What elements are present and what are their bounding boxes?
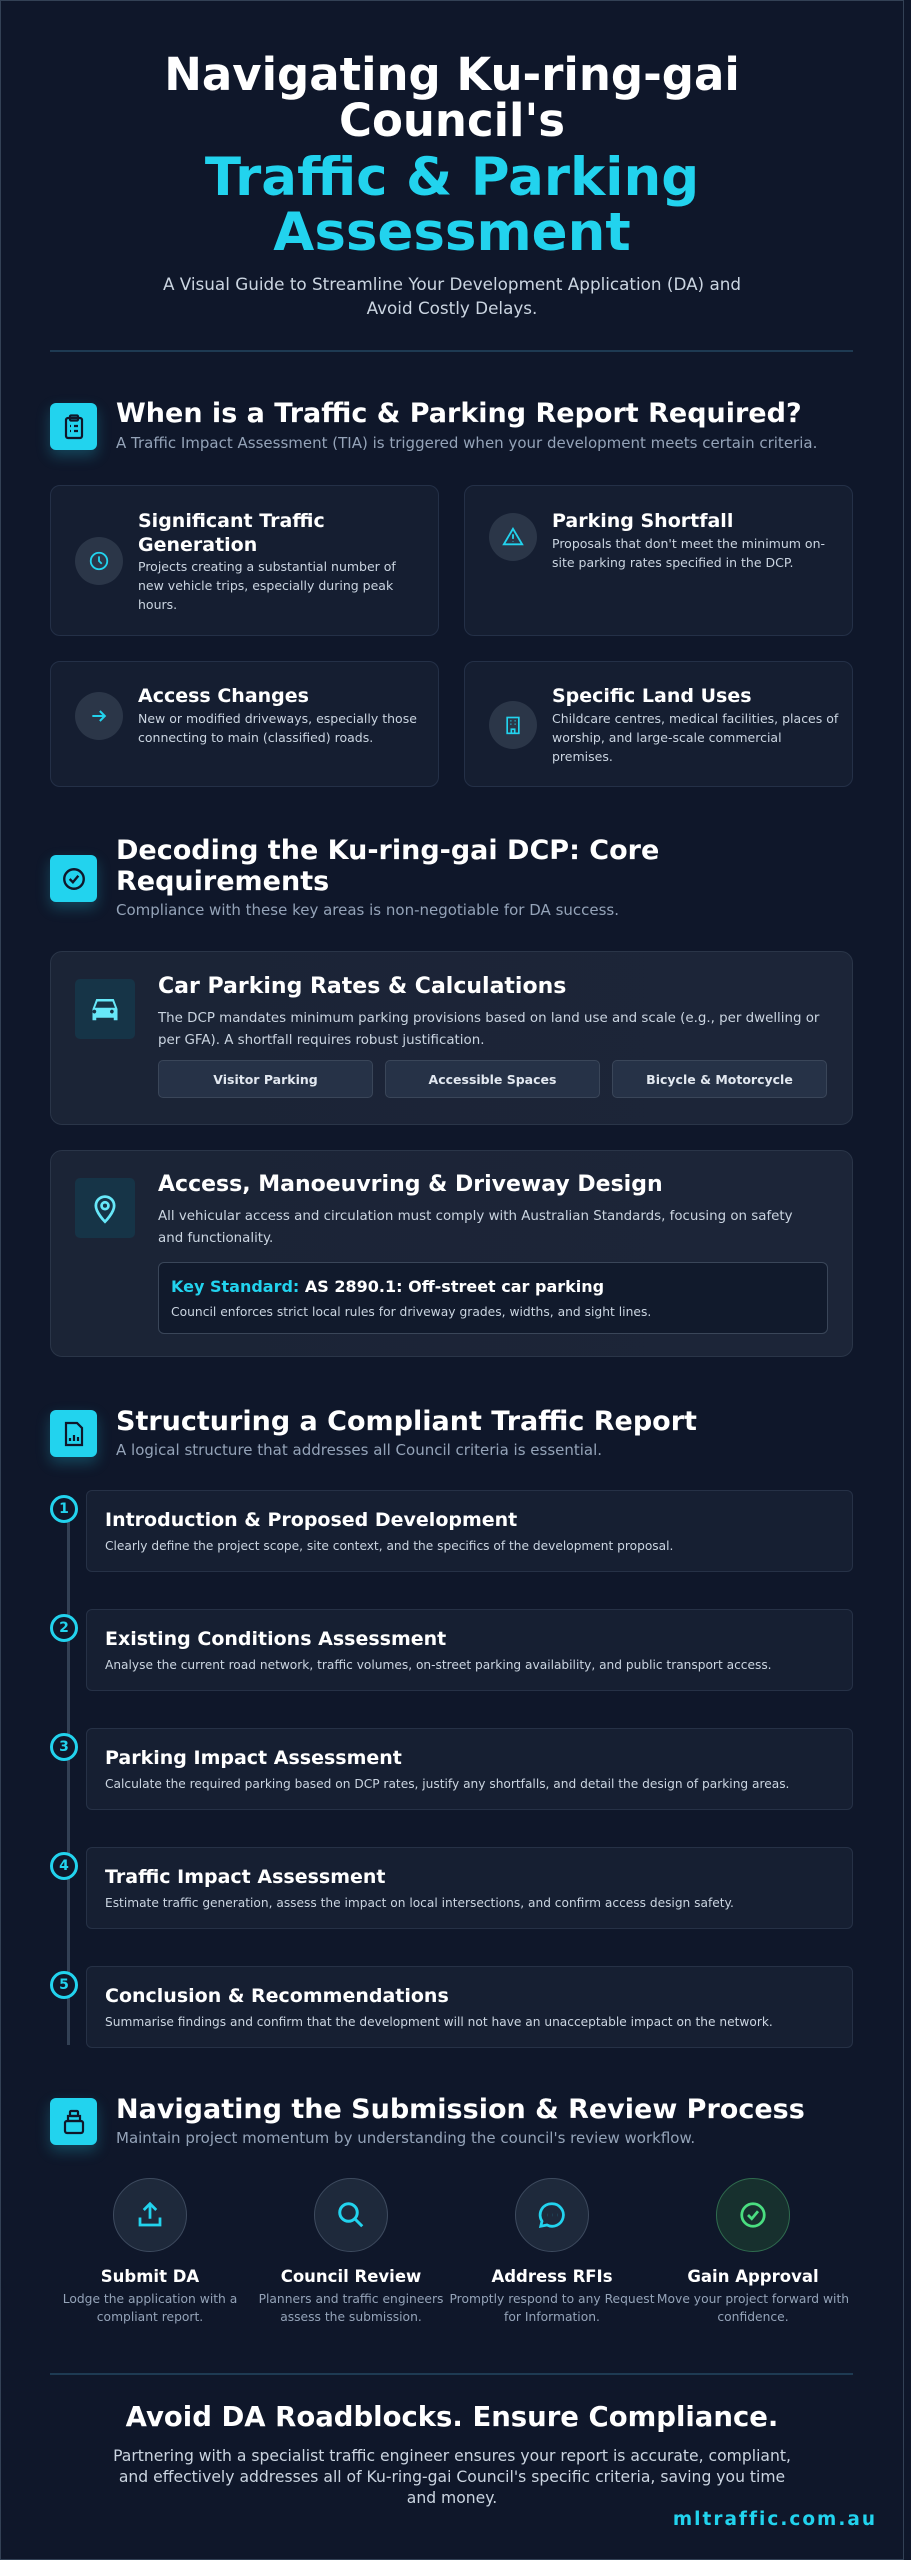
icon: report bbox=[50, 1410, 97, 1457]
title: Council's bbox=[339, 94, 565, 147]
process: submit bbox=[113, 2178, 187, 2252]
panel: car parking: The DCP mandates minimum parking provisions based on land use and scale (e.g., per dwelling or per GFA). A shortfall requires robust justification. bbox=[158, 1011, 819, 1048]
website: mltraffic.com.au bbox=[673, 2509, 877, 2530]
step 5: Conclusion & Recommendations bbox=[105, 1985, 449, 2007]
icon: building bbox=[489, 701, 537, 749]
closing text: Partnering with a specialist traffic engineer ensures your report is accurate, compliant, and effectively addresses all of Ku-ring-gai Council's specific criteria, saving you time and money. bbox=[113, 2447, 791, 2507]
step 3: Calculate the required parking based on DCP rates, justify any shortfalls, and detail the design of parking areas. bbox=[105, 1777, 789, 1791]
title: Assessment bbox=[273, 202, 631, 263]
process: review bbox=[314, 2178, 388, 2252]
heading: Structuring a Compliant Traffic Report bbox=[116, 1406, 697, 1437]
heading: When is a Traffic & Parking Report Required? bbox=[116, 398, 802, 429]
pill: bicycle: Bicycle & Motorcycle bbox=[646, 1072, 793, 1086]
panel: access design: Access, Manoeuvring & Driveway Design bbox=[158, 1172, 663, 1197]
text: Promptly respond to any Request for Information. bbox=[449, 2292, 655, 2324]
panel: access design: and functionality. bbox=[158, 1231, 273, 1246]
text: 3 bbox=[59, 1739, 69, 1755]
panel: access design bbox=[50, 1150, 853, 1357]
card: significant traffic: Significant Traffic bbox=[138, 510, 325, 532]
process: approval bbox=[716, 2178, 790, 2252]
card: parking shortfall bbox=[464, 485, 853, 636]
section 3 header bbox=[44, 1406, 697, 1470]
panel: car parking bbox=[50, 951, 853, 1125]
heading: Decoding the Ku-ring-gai DCP: Core bbox=[116, 835, 659, 866]
text: Planners and traffic engineers assess the submission. bbox=[259, 2292, 443, 2324]
step 1: Clearly define the project scope, site context, and the specifics of the development proposal. bbox=[105, 1539, 673, 1553]
pill: accessible: Accessible Spaces bbox=[429, 1072, 556, 1086]
icon: car bbox=[75, 979, 135, 1039]
heading: Navigating the Submission & Review Process bbox=[116, 2094, 805, 2125]
section 2 header bbox=[44, 835, 659, 919]
card: significant traffic bbox=[50, 485, 439, 636]
text: Gain Approval bbox=[687, 2267, 819, 2286]
card: access changes: New or modified driveways, especially those connecting to main (classified) roads. bbox=[138, 711, 417, 745]
step 4: Estimate traffic generation, assess the impact on local intersections, and confirm access design safety. bbox=[105, 1896, 734, 1910]
section 1 header: A Traffic Impact Assessment (TIA) is triggered when your development meets certain criteria. bbox=[116, 434, 817, 452]
step 1 bbox=[86, 1490, 853, 1572]
step 2: Analyse the current road network, traffic volumes, on-street parking availability, and public transport access. bbox=[105, 1658, 772, 1672]
subtitle: Avoid Costly Delays. bbox=[367, 298, 537, 318]
icon: clipboard bbox=[50, 403, 97, 450]
text: 1 bbox=[59, 1501, 69, 1517]
pill: visitor: Visitor Parking bbox=[213, 1072, 318, 1086]
step 4: Traffic Impact Assessment bbox=[105, 1866, 386, 1888]
heading: Requirements bbox=[116, 866, 329, 897]
panel: access design: All vehicular access and circulation must comply with Australian Standards, focusing on safety bbox=[158, 1209, 793, 1224]
closing heading: Avoid DA Roadblocks. Ensure Compliance. bbox=[126, 2401, 778, 2433]
card: access changes: Access Changes bbox=[138, 685, 309, 707]
icon: inbox bbox=[50, 2098, 97, 2145]
title: Traffic & Parking bbox=[205, 147, 699, 208]
heading bbox=[116, 835, 659, 897]
text: Move your project forward with confidence. bbox=[657, 2292, 849, 2324]
text: Lodge the application with a compliant report. bbox=[63, 2292, 237, 2324]
pill: bicycle bbox=[612, 1060, 827, 1098]
text: Submit DA bbox=[101, 2267, 199, 2286]
step 4 bbox=[86, 1847, 853, 1929]
icon: clock bbox=[75, 537, 123, 585]
step 2: Existing Conditions Assessment bbox=[105, 1628, 446, 1650]
card: parking shortfall: Parking Shortfall bbox=[552, 510, 733, 532]
step 5 bbox=[86, 1966, 853, 2048]
step 1: Introduction & Proposed Development bbox=[105, 1509, 517, 1531]
card: land uses: Specific Land Uses bbox=[552, 685, 752, 707]
card: parking shortfall: Proposals that don't meet the minimum on-site parking rates specified in the DCP. bbox=[552, 536, 825, 570]
text: Address RFIs bbox=[491, 2267, 613, 2286]
step 3: Parking Impact Assessment bbox=[105, 1747, 402, 1769]
callout: key standard: Council enforces strict local rules for driveway grades, widths, and sight lines. bbox=[171, 1305, 651, 1319]
card: significant traffic: Projects creating a substantial number of new vehicle trips, especially during peak hours. bbox=[138, 559, 396, 612]
timeline bbox=[67, 1522, 70, 2045]
process: RFIs bbox=[515, 2178, 589, 2252]
section 3 header: A logical structure that addresses all Council criteria is essential. bbox=[116, 1441, 602, 1459]
card: land uses: Childcare centres, medical facilities, places of worship, and large-scale commercial premises. bbox=[552, 711, 838, 764]
callout: key standard bbox=[158, 1262, 828, 1334]
card: land uses bbox=[464, 661, 853, 787]
panel: car parking: Car Parking Rates & Calculations bbox=[158, 974, 566, 999]
section 4 header bbox=[44, 2094, 805, 2158]
text: 2 bbox=[59, 1620, 69, 1636]
text: Council Review bbox=[281, 2267, 421, 2286]
icon: location pin bbox=[75, 1178, 135, 1238]
step 3 bbox=[86, 1728, 853, 1810]
subtitle bbox=[163, 274, 741, 318]
title: Navigating Ku-ring-gai bbox=[164, 48, 740, 101]
section 4 header: Maintain project momentum by understanding the council's review workflow. bbox=[116, 2129, 695, 2147]
icon: check circle bbox=[50, 855, 97, 902]
step 2 bbox=[86, 1609, 853, 1691]
icon: warning bbox=[489, 513, 537, 561]
callout: key standard: Key Standard: AS 2890.1: Off-street car parking bbox=[171, 1277, 604, 1296]
title bbox=[164, 48, 740, 263]
pill: visitor bbox=[158, 1060, 373, 1098]
card: significant traffic: Generation bbox=[138, 534, 257, 556]
icon: arrow bbox=[75, 692, 123, 740]
text: 4 bbox=[59, 1858, 69, 1874]
pill: accessible bbox=[385, 1060, 600, 1098]
step 5: Summarise findings and confirm that the development will not have an unacceptable impact on the network. bbox=[105, 2015, 773, 2029]
section 1 header bbox=[44, 398, 817, 462]
subtitle: A Visual Guide to Streamline Your Development Application (DA) and bbox=[163, 274, 741, 294]
card: access changes bbox=[50, 661, 439, 787]
section 2 header: Compliance with these key areas is non-negotiable for DA success. bbox=[116, 901, 619, 919]
text: 5 bbox=[59, 1977, 69, 1993]
